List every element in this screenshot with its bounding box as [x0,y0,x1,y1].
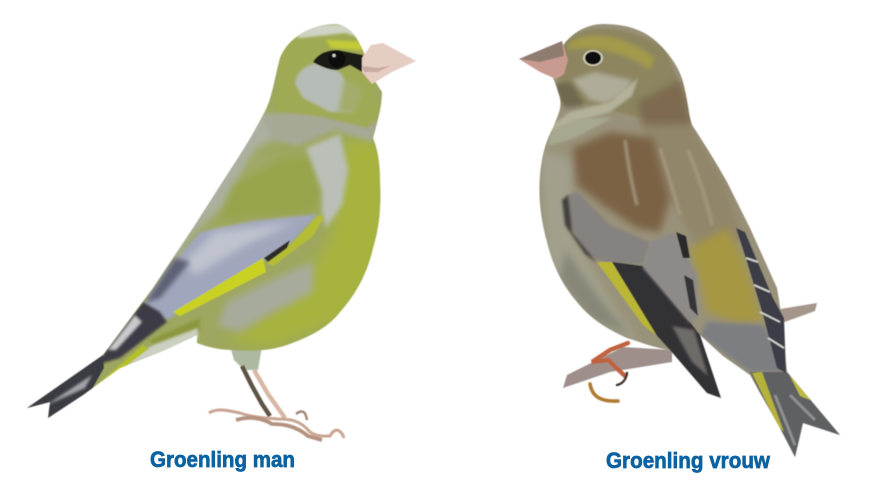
neck grey [262,108,378,146]
head [558,28,690,118]
primaries dark [612,262,721,398]
tail dark [20,355,104,420]
undertail pale [120,328,198,368]
wing blue-grey [143,214,318,320]
grey cheek [295,64,352,112]
label: female: Groenling vrouw [606,448,771,473]
secondaries far wing [736,228,786,373]
wing [562,192,721,398]
belly yellow-green [225,140,385,348]
label: male: Groenling man [150,447,295,472]
eye mask [313,50,363,72]
beak [362,43,416,84]
beak [519,41,568,79]
scapular grey [567,192,650,264]
undertail green [150,318,200,350]
bird: male greenfinch [20,15,420,440]
rump ochre yellow [690,228,763,322]
tail yellow stripe [97,344,148,385]
back grey wash [156,110,276,286]
mantle olive [220,156,320,220]
mantle brown [573,132,670,232]
secondary grey panel [643,232,698,323]
eye [328,50,346,68]
branch [563,303,817,388]
legs and feet [209,346,344,440]
body [26,23,383,418]
shoulder dark edge [562,195,597,263]
mantle feather streaks [625,140,712,225]
flank grey patch [217,262,313,332]
nape brown [637,80,694,125]
tail [750,372,842,460]
body [538,23,840,458]
lower back grey [700,322,787,372]
eye [583,50,603,66]
bird: female greenfinch [515,15,845,460]
head green [275,34,380,129]
wing yellow edge [173,258,266,316]
yellow primaries [597,262,660,338]
cheek and collar [572,72,632,104]
mantle olive-grey [644,125,741,242]
breast grey [542,152,634,338]
feet [590,343,628,401]
wing-tip dark feathers [100,302,167,364]
chest grey patch [306,134,348,228]
